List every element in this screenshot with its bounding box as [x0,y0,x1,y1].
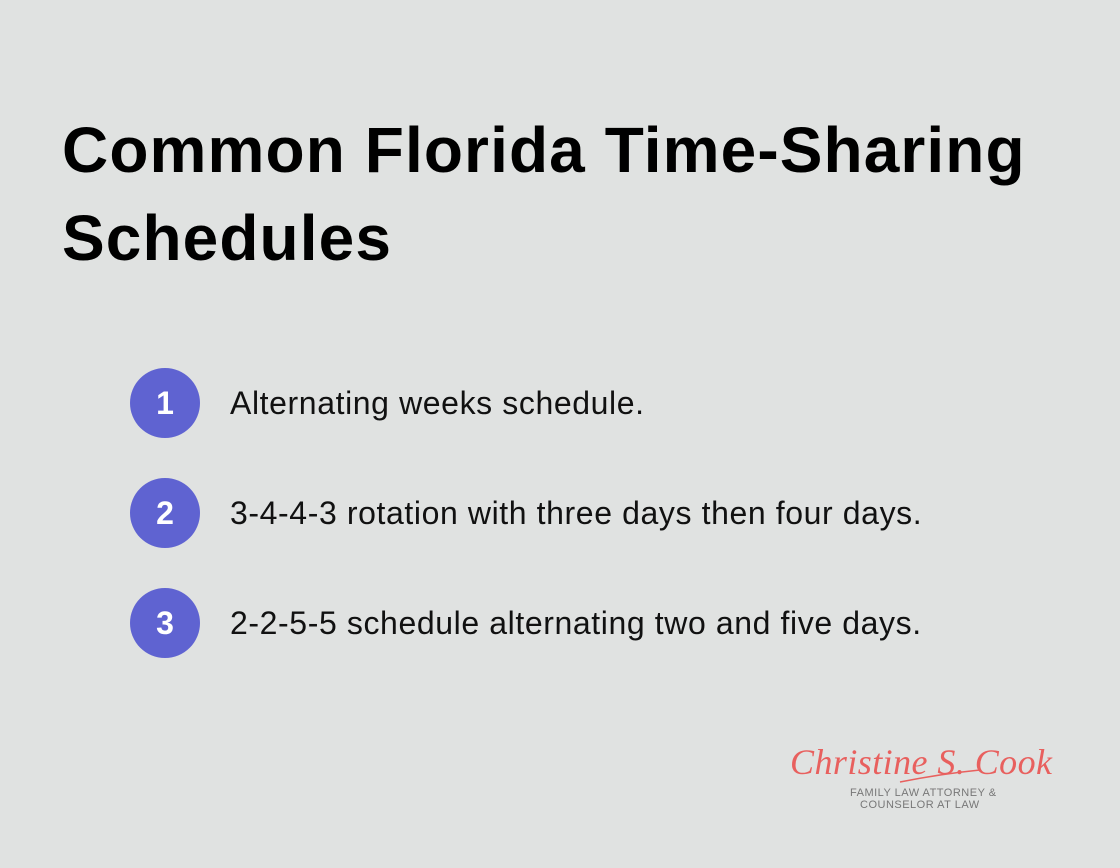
title: Schedules [62,202,392,274]
badge 3: 3 [156,605,174,641]
text 3: 2-2-5-5 schedule alternating two and five days. [230,605,922,641]
title [62,114,1026,274]
badge 3 [130,588,200,658]
badge 1 [130,368,200,438]
badge 2 [130,478,200,548]
title: Common Florida Time-Sharing [62,114,1026,186]
item 1 [130,368,645,438]
item 3 [130,588,922,658]
logo: COUNSELOR AT LAW [860,799,980,811]
badge 1: 1 [156,385,174,421]
text 1: Alternating weeks schedule. [230,385,645,421]
text 2: 3-4-4-3 rotation with three days then four days. [230,495,922,531]
item 2 [130,478,922,548]
badge 2: 2 [156,495,174,531]
logo [790,742,1053,811]
logo: Christine S. Cook [790,742,1053,782]
logo: FAMILY LAW ATTORNEY & [850,787,997,799]
